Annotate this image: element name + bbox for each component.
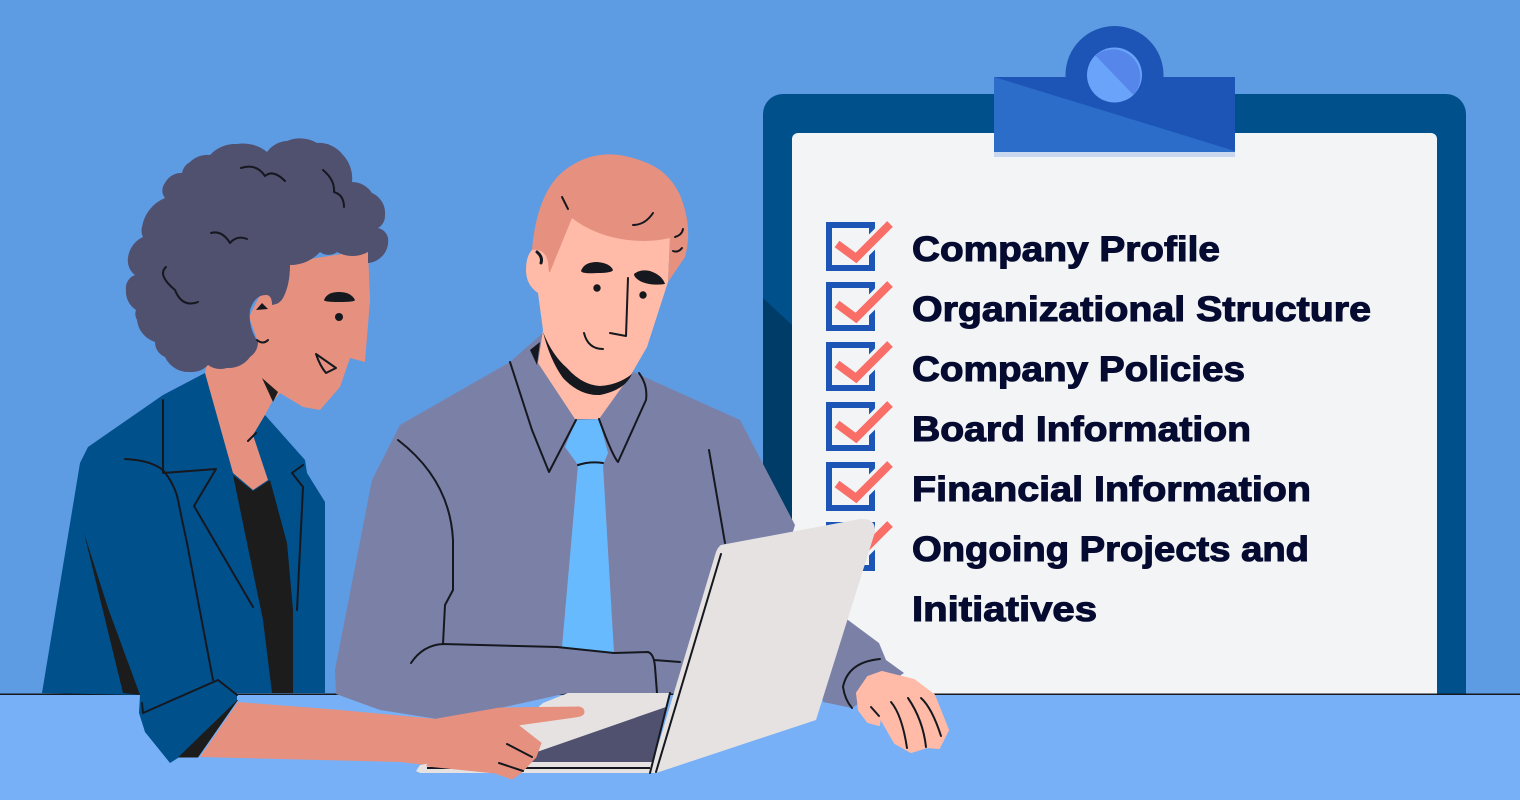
neck and face [526,218,670,419]
table [0,694,1520,800]
neck shadow [543,332,632,395]
suit body [335,333,795,719]
jacket seams [125,400,303,713]
pointing hand front [427,707,584,779]
checklist [829,222,1371,629]
neck and face [205,250,370,490]
item 2: Organizational Structure [912,290,1371,329]
person: man [335,154,948,752]
ear [526,250,549,293]
lid edge lines [650,554,721,773]
hair [532,154,688,282]
necktie [562,419,614,653]
item 3: Company Policies [912,350,1245,389]
arm [200,702,584,779]
knuckle lines [499,744,532,771]
resting hand [857,672,948,752]
item 1: Company Profile [912,230,1220,269]
checkbox 2 [829,282,892,328]
sleeve underside [178,700,238,758]
checkbox 3 [829,342,892,388]
item 6 line 1: Ongoing Projects and [912,530,1309,569]
sleeve cuff line [843,659,880,708]
item 6 line 2: Initiatives [912,590,1097,629]
paper sheet [792,133,1437,733]
far sleeve [800,560,904,708]
laptop lid [650,519,875,773]
laptop base [416,693,670,773]
ear mark [537,252,542,263]
finger lines [871,698,941,748]
checkbox 6 [829,522,892,568]
hair [126,138,388,372]
jacket [42,373,325,763]
clip hole [1087,48,1142,102]
clipboard board [763,94,1466,754]
clip bar highlight [994,77,1235,152]
hair lines [562,197,683,252]
board shadow [763,298,792,520]
clip [994,26,1235,157]
checkbox 4 [829,402,892,448]
laptop keyboard [532,707,666,762]
black shirt [233,475,293,693]
person: woman [42,138,584,779]
hair curls [163,167,344,304]
checkbox 1 [829,222,892,268]
clip knob [1066,26,1164,124]
item 5: Financial Information [912,470,1311,509]
facial features [581,262,665,349]
clip lower edge [994,152,1235,157]
shirt collar lines [510,362,646,472]
panel: clipboard [763,26,1466,754]
base front line [427,767,650,769]
checkbox 5 [829,462,892,508]
black inner jacket wedge [84,533,140,695]
clip bar [994,77,1235,152]
facial features [248,292,355,441]
clip hole shade [1096,49,1140,95]
item 4: Board Information [912,410,1251,449]
laptop [416,519,875,773]
suit seams [398,440,725,693]
